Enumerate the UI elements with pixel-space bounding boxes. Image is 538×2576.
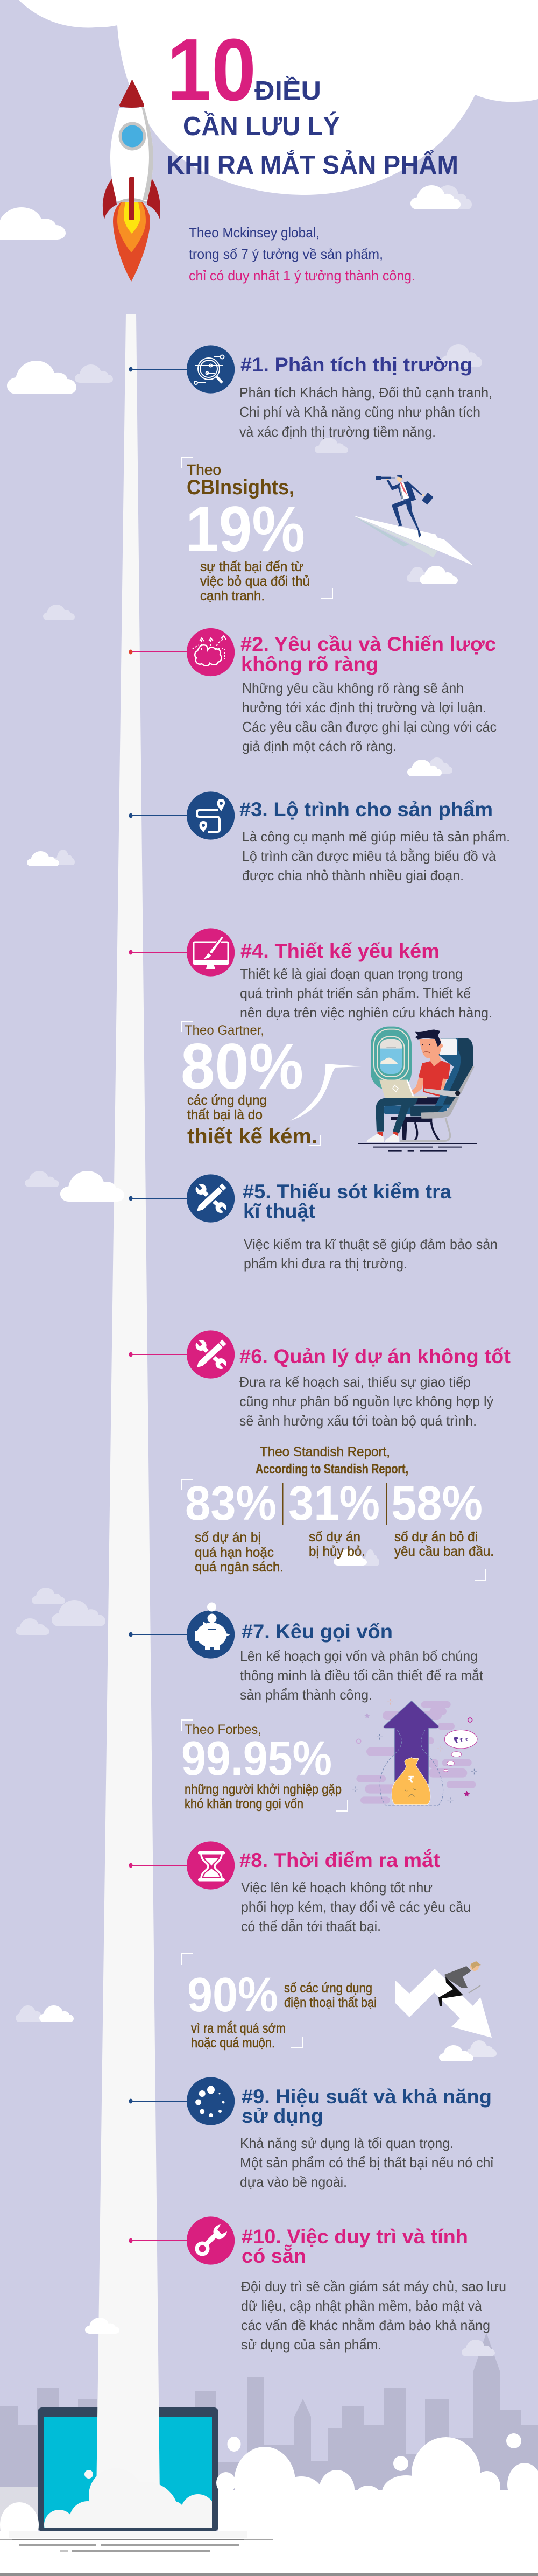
stat 83%: số dự án bị — [195, 1530, 261, 1545]
illustration: money bag and arrow: ₹ — [453, 1736, 459, 1745]
arrow: speech swoosh — [290, 1064, 362, 1121]
heading 8: #8. Thời điểm ra mắt — [239, 1849, 440, 1871]
body 9: Khả năng sử dụng là tối quan trọng. — [240, 2135, 454, 2151]
body 10: các vấn đề khác nhằm đảm bảo khả năng — [241, 2317, 490, 2333]
icon: route with pins — [187, 791, 235, 840]
pale ground at left — [0, 2487, 38, 2536]
connector 10 — [129, 2238, 187, 2243]
intro text: chỉ có duy nhất 1 ý tưởng thành công. — [189, 268, 415, 284]
stat 83%: quá hạn hoặc — [195, 1545, 274, 1560]
callout: Forbes 99.95% — [181, 1720, 348, 1812]
callout: CBInsights 19%: cạnh tranh. — [200, 588, 265, 603]
body 10: Đội duy trì sẽ cần giám sát máy chủ, sao lưu — [241, 2278, 506, 2294]
icon: monitor and brush — [187, 928, 235, 977]
body 6: cũng như phân bổ nguồn lực không hợp lý — [239, 1393, 493, 1409]
body 6 — [239, 1374, 493, 1429]
body 6: Đưa ra kế hoạch sai, thiếu sự giao tiếp — [239, 1374, 471, 1390]
icon: hourglass — [187, 1841, 235, 1890]
icon: magnifier — [187, 345, 235, 394]
body 8: phối hợp kém, thay đổi về các yêu cầu — [241, 1899, 471, 1915]
body 3 — [242, 829, 510, 883]
connector 7 — [129, 1632, 187, 1637]
body 10 — [241, 2278, 506, 2353]
stat 31%: số dự án — [309, 1529, 360, 1545]
section 1 — [129, 345, 492, 440]
section 8 — [129, 1841, 471, 1934]
body 5 — [244, 1236, 498, 1272]
body 9: Một sản phẩm có thể bị thất bại nếu nó chỉ — [240, 2154, 493, 2171]
illustration: money bag and arrow: ₹ — [408, 1774, 414, 1785]
body 7: sản phẩm thành công. — [240, 1687, 372, 1703]
icon: brain with arrows — [187, 628, 235, 676]
laptop base and shadow lines — [0, 2531, 273, 2552]
body 4: nên dựa trên việc nghiên cứu khách hàng. — [240, 1005, 492, 1021]
stat 83%: quá ngân sách. — [195, 1560, 284, 1575]
callout: Gartner 80% — [181, 1022, 320, 1148]
stat 31% — [288, 1477, 380, 1559]
body 4: Thiết kế là giai đoạn quan trọng trong — [240, 966, 463, 982]
clouds inside laptop screen — [44, 2470, 212, 2528]
section 7 — [129, 1602, 484, 1703]
heading 1: #1. Phân tích thị trường — [240, 354, 472, 376]
body 5: Việc kiểm tra kĩ thuật sẽ giúp đảm bảo sản — [244, 1236, 498, 1252]
callout: CBInsights 19% — [181, 458, 332, 603]
callout: CBInsights 19%: sự thất bại đến từ — [200, 559, 303, 574]
body 4: quá trình phát triển sản phẩm. Thiết kế — [240, 985, 471, 1001]
rocket exhaust column — [96, 314, 160, 2498]
connector 3 — [129, 813, 187, 818]
illustration: passenger with laptop — [358, 1027, 477, 1151]
icon: piggy bank — [187, 1602, 235, 1659]
callout: Standish Report stats: According to Standish Report, — [256, 1462, 408, 1477]
section 5 — [129, 1174, 498, 1272]
body 1 — [239, 384, 492, 440]
illustration: money bag and arrow: ₹ — [459, 1737, 463, 1743]
body 8 — [241, 1879, 471, 1934]
icon: loading dots — [187, 2077, 235, 2125]
intro text: Theo Mckinsey global, — [189, 224, 320, 241]
rocket — [103, 79, 160, 282]
section 10 — [129, 2216, 506, 2353]
callout: 90%: điện thoại thất bại — [284, 1995, 377, 2010]
laptop — [38, 2407, 218, 2531]
heading 5: kĩ thuật — [243, 1200, 315, 1222]
body 9: dựa vào bề ngoài. — [240, 2174, 347, 2190]
callout: Forbes 99.95%: 99.95% — [181, 1732, 332, 1786]
illustration: businessman on paper plane — [353, 475, 473, 566]
title: CẦN LƯU LÝ — [183, 112, 340, 141]
connector 1 — [129, 367, 187, 371]
stat 58%: yêu cầu ban đầu. — [394, 1544, 494, 1559]
heading 2 — [240, 633, 496, 675]
callout: CBInsights 19%: 19% — [186, 493, 305, 565]
body 3: Lộ trình cần được miêu tả bằng biểu đồ và — [242, 848, 497, 864]
arrow: falling zigzag with man — [395, 1961, 492, 2038]
callout: Forbes 99.95%: khó khăn trong gọi vốn — [185, 1796, 303, 1812]
callout: 90%: vì ra mắt quá sớm — [191, 2020, 286, 2036]
intro text: trong số 7 ý tưởng về sản phẩm, — [189, 246, 383, 262]
body 6: sẽ ảnh hưởng xấu tới toàn bộ quá trình. — [239, 1413, 477, 1429]
connector 4 — [129, 950, 187, 955]
bottom rule — [0, 2573, 538, 2576]
body 1: Chi phí và Khả năng cũng như phân tích — [239, 404, 480, 420]
heading 2: #2. Yêu cầu và Chiến lược — [240, 633, 496, 655]
icon: wrench — [187, 2216, 235, 2265]
title — [166, 20, 458, 180]
title: ĐIỀU — [254, 76, 321, 106]
body 2: Những yêu cầu không rõ ràng sẽ ảnh — [242, 680, 464, 696]
heading 10 — [242, 2226, 468, 2267]
body 8: có thể dẫn tới thaất bại. — [241, 1918, 381, 1934]
heading 6: #6. Quản lý dự án không tốt — [239, 1345, 511, 1367]
callout: 90%: 90% — [187, 1968, 278, 2022]
section 4 — [129, 928, 492, 1021]
connector 5 — [129, 1196, 187, 1201]
scattered clouds — [0, 185, 497, 2356]
title: 10 — [167, 20, 256, 119]
city skyline — [0, 2333, 538, 2509]
stat 58%: số dự án bỏ đi — [394, 1529, 478, 1545]
callout: CBInsights 19%: CBInsights, — [187, 476, 294, 499]
big title cloud — [19, 0, 538, 195]
body 9 — [240, 2135, 493, 2190]
body 2 — [242, 680, 497, 754]
stat 31%: bị hủy bỏ. — [309, 1544, 365, 1559]
stat 58%: 58% — [391, 1477, 483, 1531]
body 1: và xác định thị trường tiềm năng. — [239, 424, 436, 440]
stat 83%: 83% — [185, 1477, 277, 1531]
body 2: giả định một cách rõ ràng. — [242, 738, 397, 754]
heading 3: #3. Lộ trình cho sản phẩm — [239, 798, 493, 820]
illustration: money bag and arrow — [352, 1699, 477, 1806]
section 2 — [129, 628, 497, 754]
icon: wrench and pencil — [187, 1174, 235, 1223]
callout: Standish Report stats — [181, 1444, 494, 1580]
title: KHI RA MẮT SẢN PHẨM — [166, 150, 458, 180]
callout: Forbes 99.95%: Theo Forbes, — [185, 1722, 261, 1737]
connector 2 — [129, 649, 187, 655]
body 1: Phân tích Khách hàng, Đối thủ cạnh tranh, — [239, 384, 492, 401]
section 3 — [129, 791, 510, 883]
heading 9 — [242, 2086, 492, 2127]
heading 10: #10. Việc duy trì và tính — [242, 2226, 468, 2248]
body 7: Lên kế hoạch gọi vốn và phân bổ chúng — [240, 1648, 478, 1664]
callout: Gartner 80%: các ứng dụng — [187, 1093, 267, 1108]
heading 9: #9. Hiệu suất và khả năng — [242, 2086, 492, 2108]
body 3: được chia nhỏ thành nhiều giai đoạn. — [242, 867, 464, 883]
callout: CBInsights 19%: Theo — [187, 461, 221, 478]
body 10: dữ liệu, cập nhật phần mềm, bảo mật và — [241, 2298, 483, 2314]
section 9 — [129, 2077, 493, 2190]
heading 9: sử dụng — [242, 2105, 323, 2127]
foreground clouds — [0, 2433, 538, 2576]
stat 31%: 31% — [288, 1477, 380, 1531]
body 2: hưởng tới xác định thị trường và lợi luận. — [242, 699, 486, 715]
callout: 90%: số các ứng dụng — [284, 1981, 372, 1996]
icon: wrench and pencil pink — [187, 1330, 235, 1379]
intro text — [189, 224, 415, 284]
stat 83% — [185, 1477, 284, 1575]
connector 6 — [129, 1352, 187, 1357]
connector 8 — [129, 1863, 187, 1868]
heading 4: #4. Thiết kế yếu kém — [240, 940, 440, 962]
heading 7: #7. Kêu gọi vốn — [242, 1620, 393, 1643]
callout: Forbes 99.95%: những người khởi nghiệp gặp — [185, 1782, 342, 1797]
heading 2: không rõ ràng — [241, 653, 378, 675]
body 5: phẩm khi đưa ra thị trường. — [244, 1255, 407, 1272]
connector 9 — [129, 2098, 187, 2104]
callout: CBInsights 19%: việc bỏ qua đối thủ — [200, 574, 310, 589]
heading 5 — [243, 1181, 451, 1222]
body 3: Là công cụ mạnh mẽ giúp miêu tả sản phẩm. — [242, 829, 510, 845]
heading 5: #5. Thiếu sót kiểm tra — [243, 1181, 451, 1203]
callout: Gartner 80%: 80% — [181, 1030, 303, 1103]
body 7 — [240, 1648, 484, 1703]
body 7: thông minh là điều tối cần thiết để ra mắt — [240, 1667, 484, 1683]
callout: 90% — [181, 1954, 377, 2051]
illustration: money bag and arrow: ₹ — [465, 1738, 468, 1742]
section 6 — [129, 1330, 511, 1429]
body 10: sử dụng của sản phẩm. — [241, 2336, 381, 2353]
callout: 90%: hoặc quá muộn. — [191, 2035, 275, 2051]
heading 10: có sẵn — [242, 2244, 306, 2267]
body 4 — [240, 966, 492, 1021]
callout: Gartner 80%: thất bại là do — [187, 1107, 263, 1122]
body 8: Việc lên kế hoạch không tốt như — [241, 1879, 433, 1896]
callout: Gartner 80%: thiết kế kém. — [187, 1125, 317, 1148]
callout: Standish Report stats: Theo Standish Report, — [260, 1444, 390, 1459]
callout: Gartner 80%: Theo Gartner, — [185, 1023, 264, 1038]
body 2: Các yêu cầu cần được ghi lại cùng với các — [242, 719, 497, 735]
stat 58% — [391, 1477, 494, 1559]
